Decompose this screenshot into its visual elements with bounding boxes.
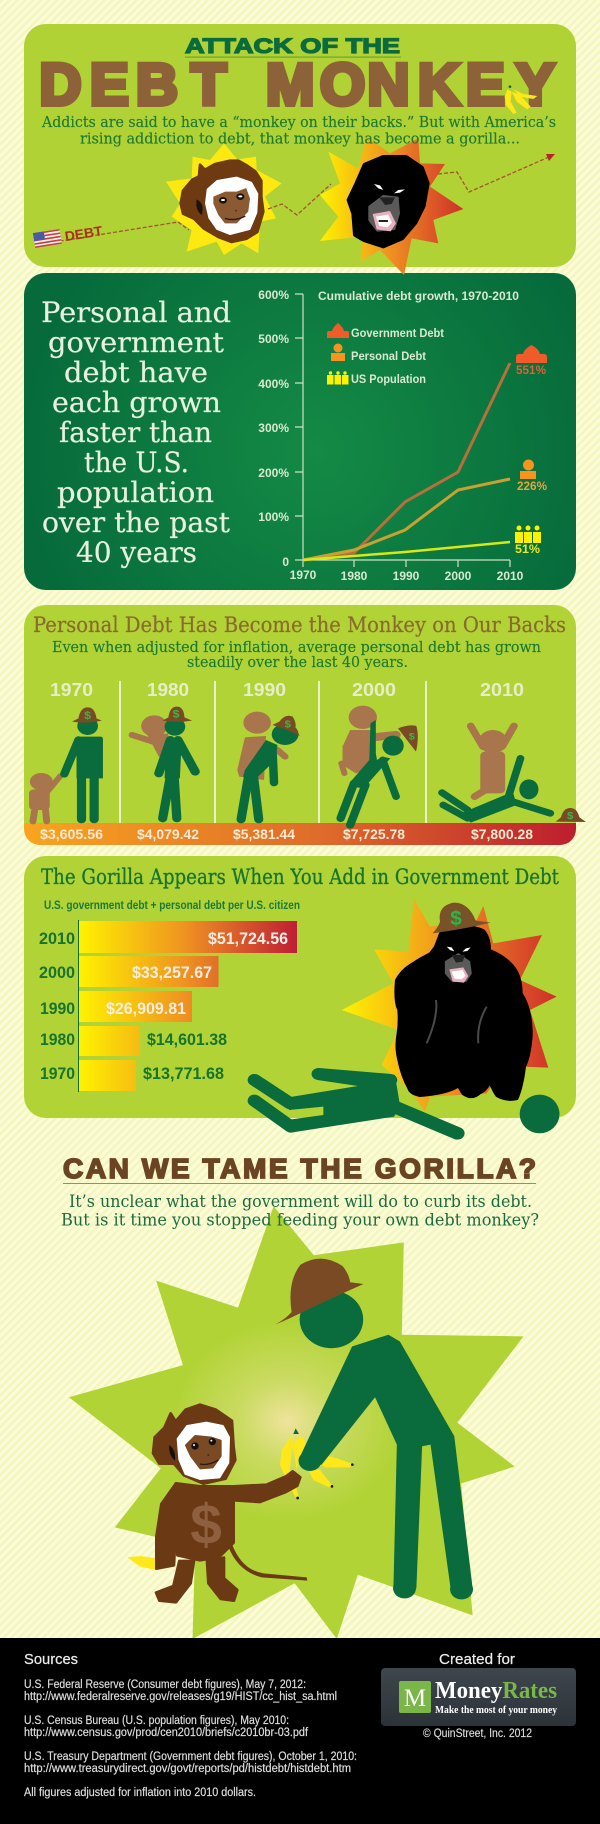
decade dividers xyxy=(120,681,426,823)
monkey dollar sign: $ xyxy=(190,1494,222,1557)
series: personal debt xyxy=(303,479,510,560)
personal debt amount bar: $7,725.78 xyxy=(343,827,406,842)
marker: population 51% xyxy=(515,526,541,556)
year labels: 2010 xyxy=(39,930,75,948)
bars xyxy=(79,921,297,1091)
chart axes xyxy=(295,294,510,567)
value labels: $51,724.56 xyxy=(208,930,288,948)
x axis labels: 1990 xyxy=(393,569,420,583)
panel heading: personal and government debt: each grown xyxy=(52,386,221,419)
year labels: 2000 xyxy=(39,964,75,982)
man body xyxy=(299,1335,473,1599)
sources list: http://www.federalreserve.gov/releases/g19/HIST/cc_hist_sa.html xyxy=(24,1691,337,1703)
panel heading: personal debt monkey: Personal Debt Has Become the Monkey on Our Backs xyxy=(33,613,566,637)
series: us population xyxy=(303,542,510,560)
icon: banana bunch offered xyxy=(280,1428,354,1499)
personal debt amount bar: $5,381.44 xyxy=(233,827,296,842)
panel heading: personal and government debt: faster than xyxy=(59,416,212,449)
decade year labels: 2010 xyxy=(480,680,524,700)
legend xyxy=(327,323,444,386)
moneyrates logo xyxy=(381,1668,576,1726)
panel subheading: steadily over the last 40 years. xyxy=(187,655,408,671)
marker: government 551%: 551% xyxy=(516,363,546,377)
panel: intro background xyxy=(24,24,576,267)
figure: man feeding monkey xyxy=(276,1259,473,1599)
decade year labels xyxy=(50,680,524,700)
x axis labels: 1970 xyxy=(290,568,317,582)
series: government debt xyxy=(303,363,510,560)
panel: personal debt background xyxy=(24,605,576,845)
title underline xyxy=(185,56,401,58)
panel heading: personal and government debt: debt have xyxy=(64,356,208,389)
sources list: U.S. Treasury Department (Government debt figures), October 1, 2010: xyxy=(24,1751,357,1763)
chart subtitle: U.S. government debt + personal debt per U.S. citizen xyxy=(44,900,300,912)
title line: debt monkey: DEBT MONKEY xyxy=(40,52,555,118)
figure: man lying down xyxy=(254,1068,560,1133)
panel subheading xyxy=(52,640,541,671)
year labels: 1970 xyxy=(40,1065,75,1083)
closing paragraph: It’s unclear what the government will do to curb its debt. xyxy=(69,1192,532,1211)
gorilla body xyxy=(395,927,532,1100)
figure 1970: $ xyxy=(84,711,92,722)
figure 1990 xyxy=(237,712,300,819)
panel heading: personal and government debt: population xyxy=(57,476,214,509)
icon: gorilla sunburst xyxy=(320,137,463,275)
figure 2010: $ xyxy=(567,811,573,822)
marker: population 51%: 51% xyxy=(515,542,540,556)
marker: government 551% xyxy=(516,345,547,377)
chart title: Cumulative debt growth, 1970-2010 xyxy=(318,289,519,303)
gorilla face xyxy=(446,947,471,983)
intro paragraph: rising addiction to debt, that monkey has become a gorilla... xyxy=(80,130,520,148)
sources list: U.S. Federal Reserve (Consumer debt figures), May 7, 2012: xyxy=(24,1679,306,1691)
legend icon: population xyxy=(327,371,348,384)
icon: gorilla head xyxy=(349,157,427,246)
panel: growth chart background xyxy=(24,273,576,590)
value labels: $33,257.67 xyxy=(132,964,212,982)
sources list: U.S. Census Bureau (U.S. population figures), May 2010: xyxy=(24,1715,289,1727)
y axis labels: 500% xyxy=(258,332,289,346)
figure 2000: $ xyxy=(409,732,415,742)
icon: big gorilla with sunburst xyxy=(342,899,557,1112)
decade year labels: 2000 xyxy=(352,680,396,700)
legend label: government: Government Debt xyxy=(351,326,444,340)
heading underline xyxy=(63,1183,536,1184)
figure 2010 xyxy=(442,726,586,823)
bar chart: debt per citizen xyxy=(39,920,297,1092)
decade year labels: 1980 xyxy=(147,680,189,700)
legend icon: personal xyxy=(331,344,345,361)
legend label: population: US Population xyxy=(351,372,426,386)
y axis labels: 300% xyxy=(258,421,289,435)
figures: man and growing monkey by decade xyxy=(29,706,586,825)
sources heading: Sources xyxy=(24,1651,78,1668)
figure 1980 xyxy=(132,707,195,818)
y axis labels xyxy=(258,288,289,569)
value labels: $13,771.68 xyxy=(143,1065,224,1083)
man head xyxy=(300,1291,363,1348)
personal debt amount bar: $7,800.28 xyxy=(471,827,534,842)
panel subheading: Even when adjusted for inflation, average personal debt has grown xyxy=(52,640,541,656)
x axis labels: 2000 xyxy=(445,569,472,583)
panel heading: personal and government debt xyxy=(41,296,231,569)
monkey held banana xyxy=(127,1556,157,1570)
personal debt amount bar xyxy=(24,823,576,845)
figure 1980: $ xyxy=(173,709,180,720)
panel heading: personal and government debt: over the past xyxy=(42,506,231,539)
intro paragraph xyxy=(41,113,556,148)
marker: personal 226%: 226% xyxy=(517,479,547,493)
value labels: $14,601.38 xyxy=(147,1031,227,1049)
y axis labels: 600% xyxy=(258,288,289,302)
figure 2000 xyxy=(341,706,418,825)
icon: us flag and debt label xyxy=(33,222,104,249)
line chart: cumulative debt growth xyxy=(258,288,547,583)
monkey limbs xyxy=(156,1483,237,1602)
sources list: http://www.census.gov/prod/cen2010/briefs/c2010br-03.pdf xyxy=(24,1727,309,1739)
y axis labels: 400% xyxy=(258,377,289,391)
gorilla hat: $ xyxy=(450,907,462,930)
y axis labels: 100% xyxy=(258,510,289,524)
x axis labels: 1980 xyxy=(341,569,368,583)
figure 1970 xyxy=(29,707,103,821)
legend icon: government xyxy=(327,323,349,338)
icon: monkey head xyxy=(181,161,263,242)
decade year labels: 1970 xyxy=(50,680,93,700)
legend label: personal: Personal Debt xyxy=(351,349,426,363)
bar axis xyxy=(78,920,79,1092)
value labels: $26,909.81 xyxy=(106,1000,186,1018)
panel heading: personal and government debt: government xyxy=(48,326,225,359)
gorilla fur highlights xyxy=(427,1000,487,1043)
figure: monkey with dollar sign xyxy=(127,1405,307,1602)
figure 1990: $ xyxy=(285,719,291,730)
gorilla hat xyxy=(433,903,491,933)
year labels xyxy=(39,930,75,1083)
moneyrates logo: Make the most of your money xyxy=(435,1705,558,1716)
final section starburst xyxy=(69,1206,524,1639)
title line: attack of the: ATTACK OF THE xyxy=(185,34,400,58)
monkey face xyxy=(169,1423,229,1479)
year labels: 1980 xyxy=(40,1031,75,1049)
panel: gorilla background xyxy=(24,856,576,1118)
icon: banana bunch on title xyxy=(505,85,537,114)
debt trend dashed arrow xyxy=(36,154,555,245)
gorilla sunburst xyxy=(342,899,557,1112)
man hat xyxy=(276,1259,364,1325)
panel heading: personal and government debt: the U.S. xyxy=(84,446,189,479)
y axis labels: 200% xyxy=(258,466,289,480)
icon: monkey sunburst xyxy=(166,143,282,255)
heading: can we tame the gorilla: CAN WE TAME THE GORILLA? xyxy=(63,1153,536,1184)
monkey tail xyxy=(228,1543,307,1581)
created for label: Created for xyxy=(439,1651,515,1668)
x axis labels: 2010 xyxy=(497,569,524,583)
marker: personal 226% xyxy=(517,460,547,493)
closing paragraph xyxy=(61,1192,539,1230)
sources list xyxy=(24,1679,357,1799)
intro paragraph: Addicts are said to have a “monkey on their backs.” But with America’s xyxy=(41,113,556,131)
moneyrates logo: MoneyRates xyxy=(435,1678,557,1704)
panel heading: personal and government debt: Personal and xyxy=(41,296,231,329)
copyright: © QuinStreet, Inc. 2012 xyxy=(423,1728,532,1740)
icon: us flag and debt label: DEBT xyxy=(64,223,104,244)
decade year labels: 1990 xyxy=(243,680,286,700)
moneyrates logo: M xyxy=(404,1685,426,1712)
personal debt amount bar: $4,079.42 xyxy=(137,827,199,842)
y axis labels: 0 xyxy=(282,555,289,569)
monkey head xyxy=(153,1405,235,1484)
sources list: All figures adjusted for inflation into 2010 dollars. xyxy=(24,1787,256,1799)
personal debt amount bar: $3,605.56 xyxy=(40,827,104,842)
sources list: http://www.treasurydirect.gov/govt/reports/pd/histdebt/histdebt.htm xyxy=(24,1763,351,1775)
panel heading: personal and government debt: 40 years xyxy=(76,536,197,569)
closing paragraph: But is it time you stopped feeding your own debt monkey? xyxy=(61,1210,539,1230)
year labels: 1990 xyxy=(40,1000,75,1018)
x axis labels xyxy=(290,568,524,583)
monkey torso and arm xyxy=(176,1471,300,1560)
value labels xyxy=(106,930,288,1083)
footer xyxy=(0,1638,600,1824)
header: attack of the debt monkey xyxy=(40,34,555,118)
